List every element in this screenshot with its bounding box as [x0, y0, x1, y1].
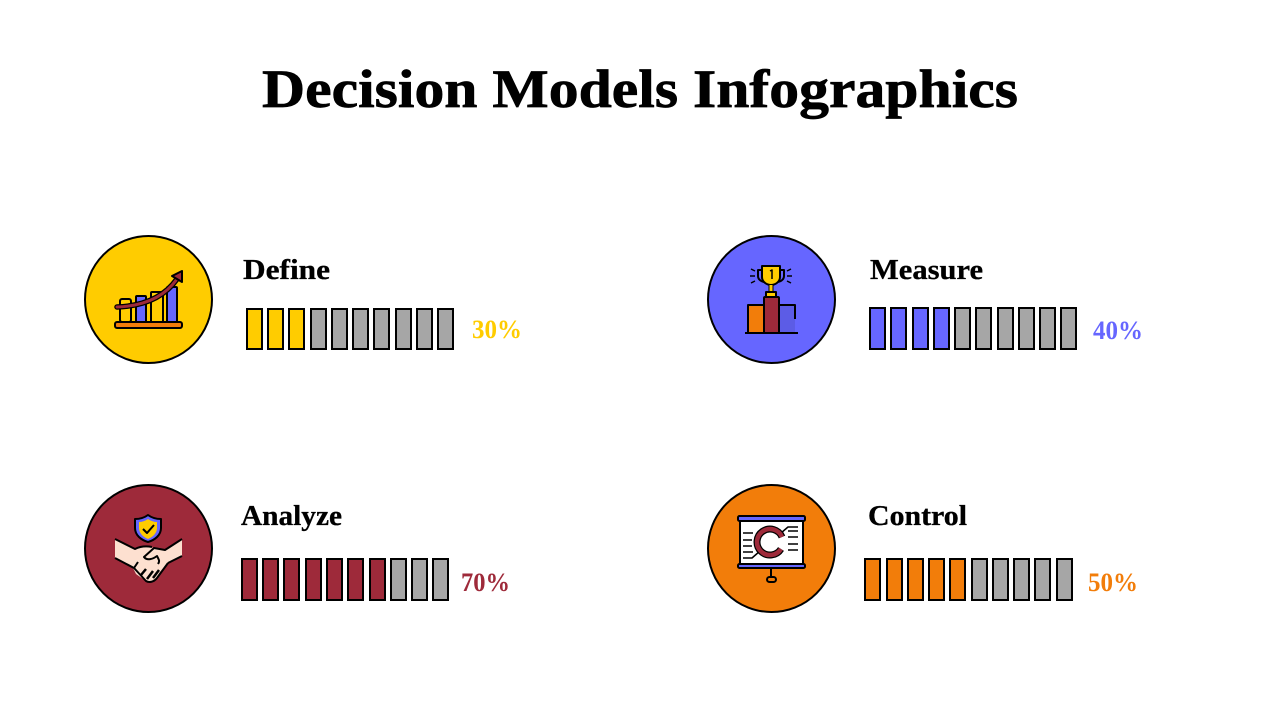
progress bar: analyze 70%: [242, 559, 448, 600]
progress bar: measure 40%: [870, 308, 1076, 349]
progress bar: define 30%: [247, 309, 453, 349]
heading: define: Define: [243, 255, 330, 286]
value: 30%: 30%: [472, 315, 522, 344]
panel: measure: [708, 236, 1143, 363]
heading: measure: Measure: [870, 255, 983, 286]
panel: define: [85, 236, 522, 363]
progress bar: control 50%: [865, 559, 1072, 600]
panel: analyze: [85, 485, 510, 612]
value: 70%: 70%: [461, 568, 510, 597]
icon: handshake with shield in red circle: [85, 485, 212, 612]
icon: trophy on podium in blue circle: [708, 236, 835, 363]
panel: control: [708, 485, 1138, 612]
value: 50%: 50%: [1088, 568, 1138, 597]
icon: presentation board in orange circle: [708, 485, 835, 612]
heading: control: Control: [868, 501, 967, 532]
value: 40%: 40%: [1093, 316, 1143, 345]
icon: growth chart in yellow circle: [85, 236, 212, 363]
heading: analyze: Analyze: [241, 501, 342, 532]
title: Decision Models Infographics: [262, 59, 1018, 119]
